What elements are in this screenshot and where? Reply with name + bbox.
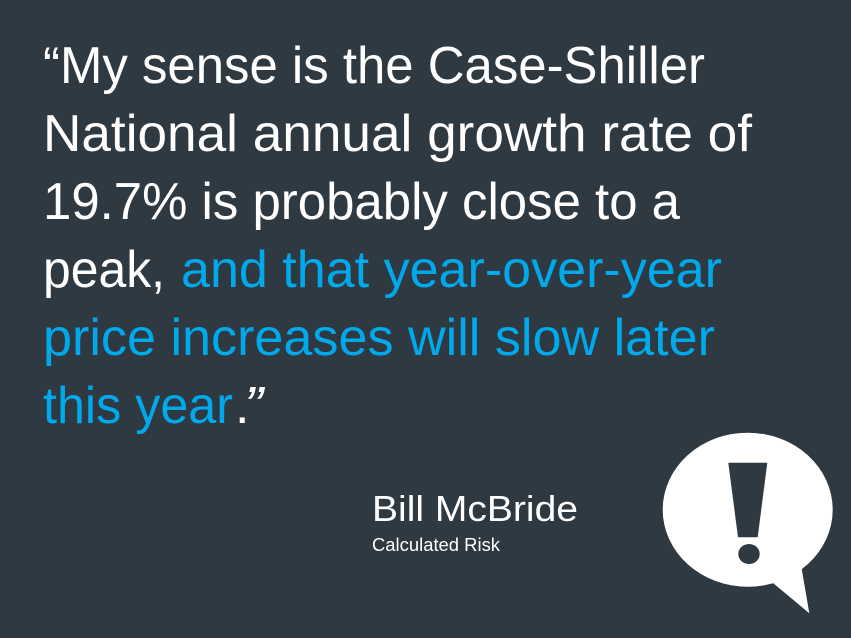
quote text: 19.7% is probably close to a (43, 173, 680, 231)
icon: speech bubble with exclamation mark (663, 433, 833, 613)
quote text: peak, (43, 241, 165, 299)
quote text: and that year-over-year (181, 241, 722, 299)
attribution (372, 488, 578, 555)
quote text: “My sense is the Case-Shiller (43, 37, 705, 95)
quote text: price increases will slow later (43, 309, 715, 367)
attribution: Bill McBride (372, 488, 578, 529)
quote text: ” (244, 377, 266, 435)
attribution: Calculated Risk (372, 534, 501, 555)
quote text (43, 37, 753, 435)
quote text: . (235, 377, 249, 435)
quote text: National annual growth rate of (43, 105, 753, 163)
quote text: this year (43, 377, 233, 435)
